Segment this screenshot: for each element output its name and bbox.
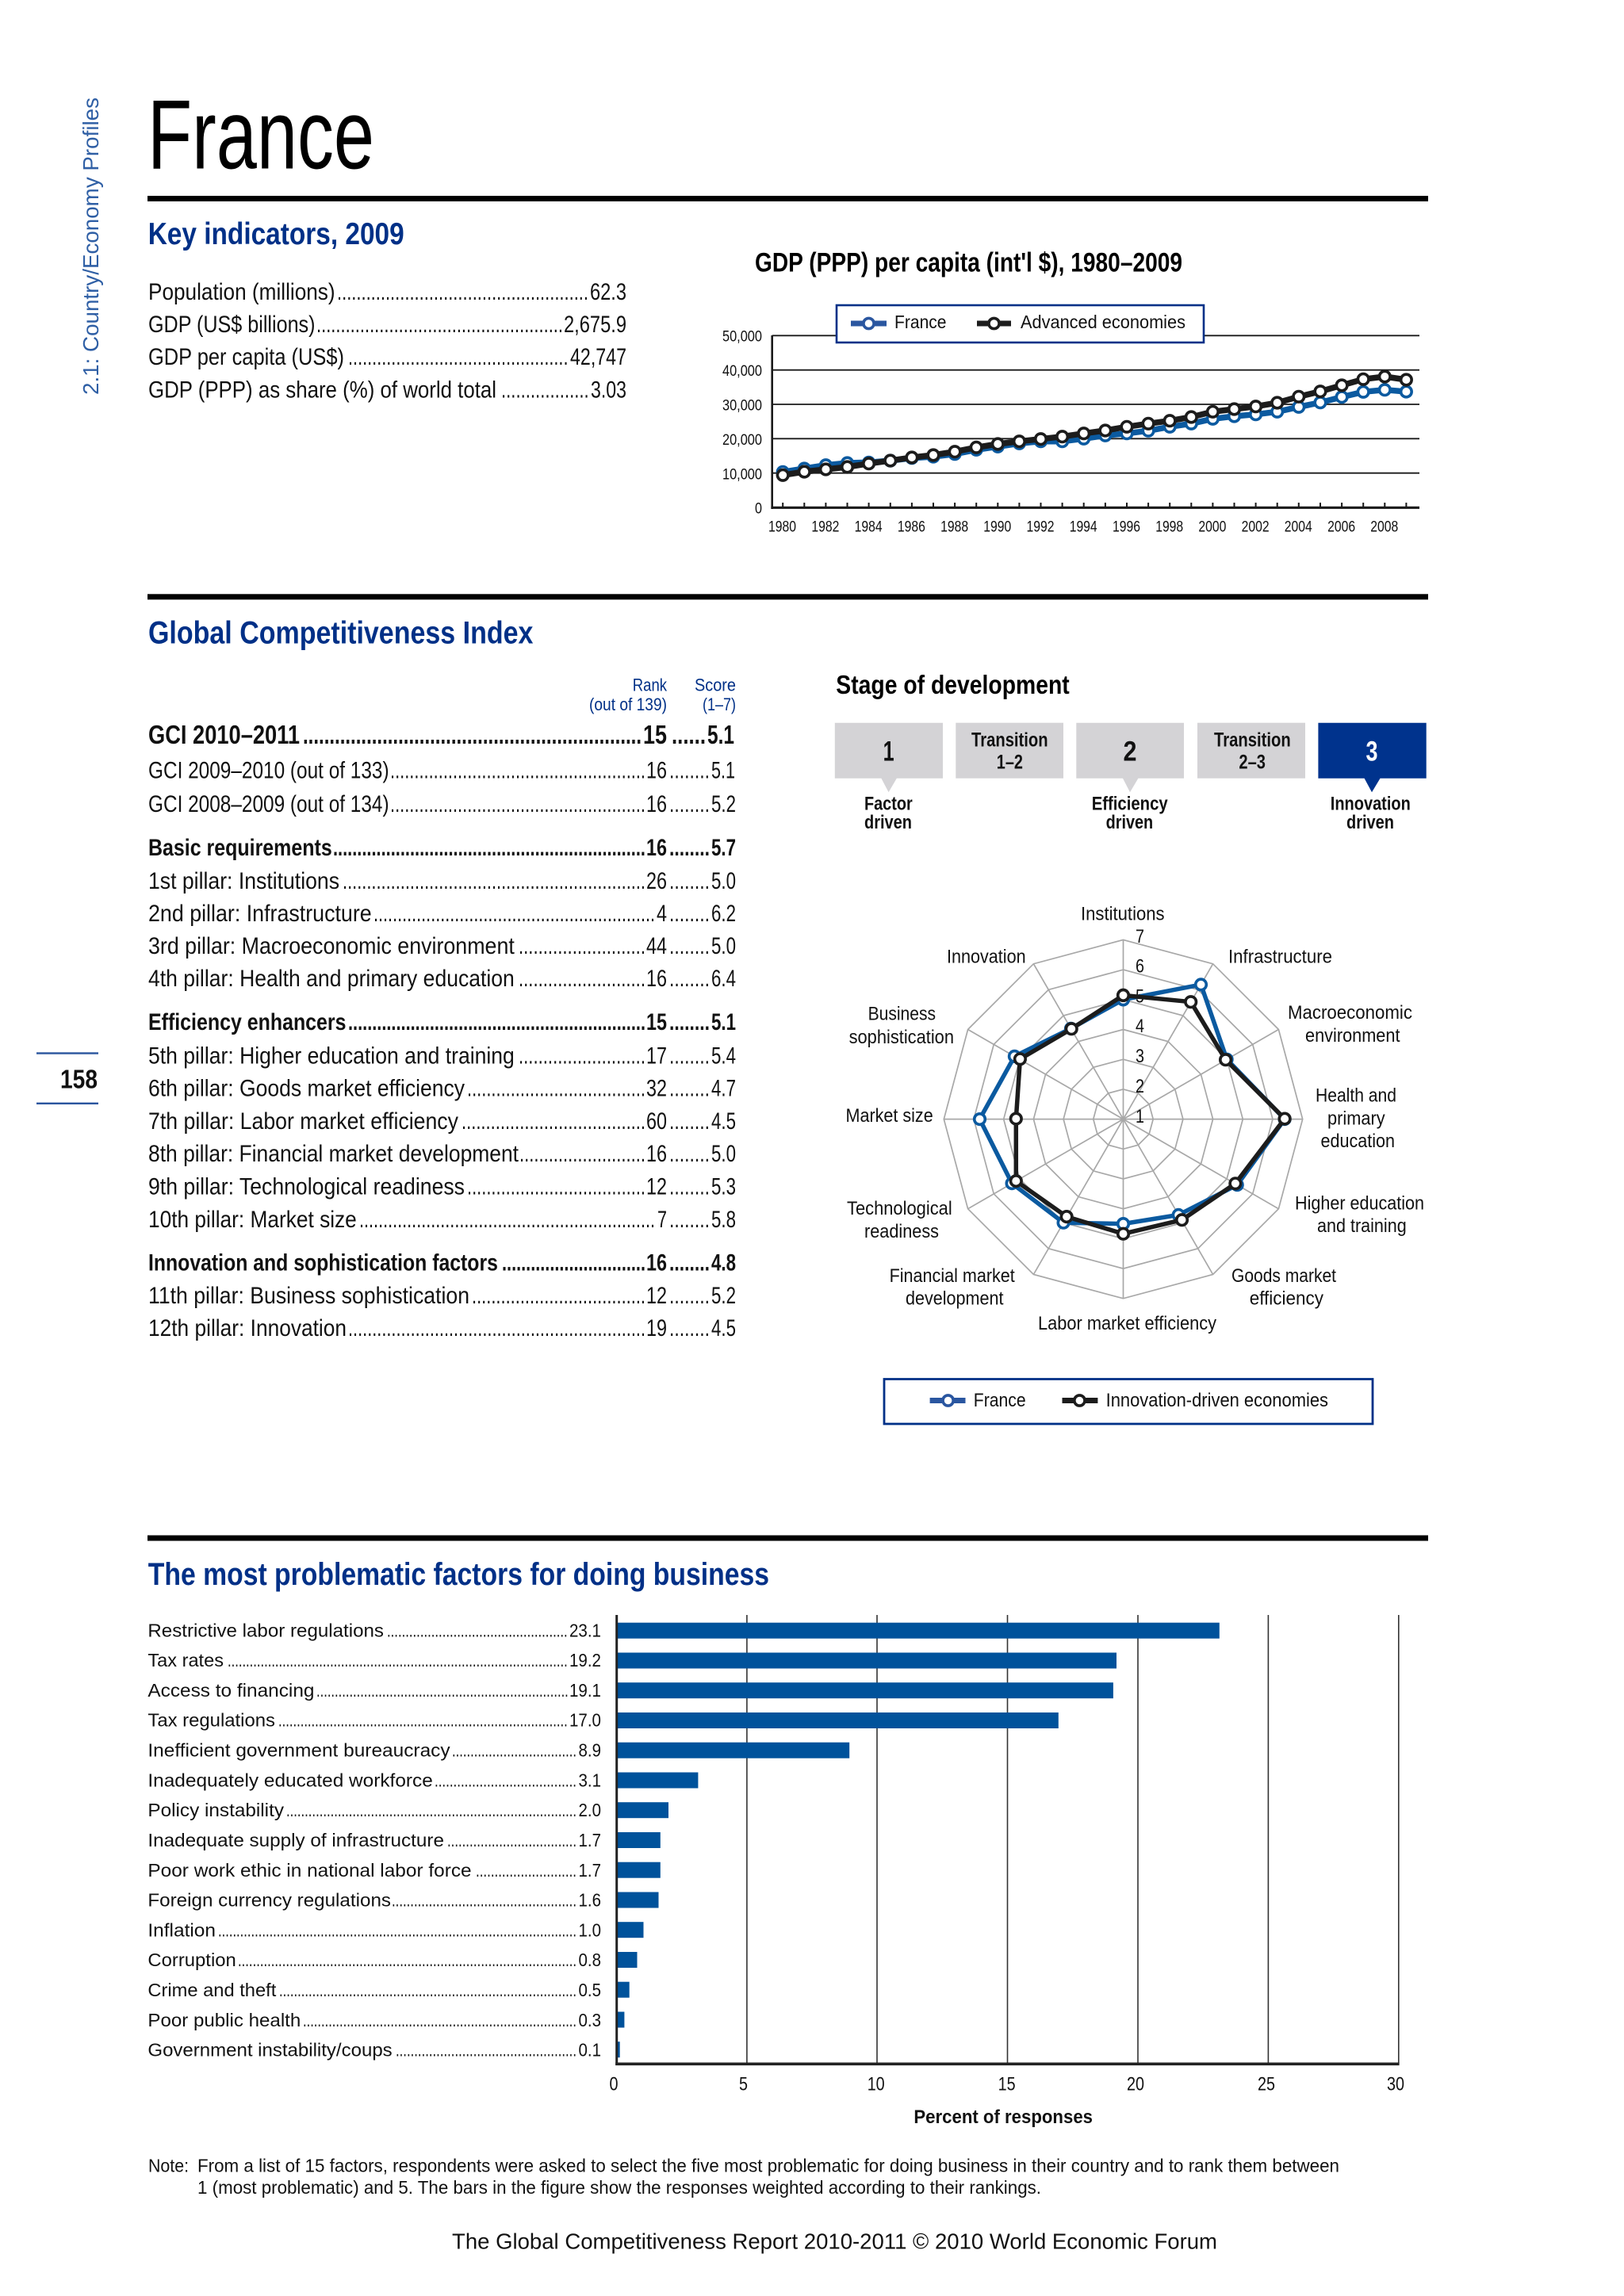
radar axis labels: Goods market: [1231, 1265, 1336, 1287]
radar scale numbers: 6: [1136, 956, 1144, 977]
panel: problematic factors bar chart: [147, 1615, 1404, 2128]
row: 4th pillar: 16: [646, 966, 667, 992]
factor row: tax regulations: Tax regulations: [147, 1709, 275, 1730]
factor row: inadequately educated workforce: 3.1: [579, 1770, 601, 1790]
radar axis labels: primary: [1327, 1108, 1385, 1129]
factor row: tax regulations: [147, 1709, 601, 1730]
factor row: policy instability: ...............................................................................: [286, 1800, 576, 1820]
row: population: Population (millions): [148, 279, 335, 305]
factor row: restrictive labor regulations: .................................................: [387, 1620, 568, 1640]
row: 3rd pillar: [148, 933, 736, 959]
row: 6th pillar: 4.7: [711, 1076, 736, 1102]
row: 9th pillar: 5.3: [711, 1174, 736, 1200]
factor row: policy instability: 2.0: [579, 1800, 601, 1820]
radar axis labels: Health and: [1316, 1085, 1396, 1107]
transition 1-2 box: [956, 723, 1063, 779]
factor row: restrictive labor regulations: 23.1: [569, 1620, 601, 1640]
row: GDP per capita: [148, 344, 626, 370]
x axis labels: 1994: [1070, 519, 1097, 536]
factor row: inadequately educated workforce: Inadequately educated workforce: [147, 1770, 433, 1790]
radar axis labels: Institutions: [1081, 903, 1165, 924]
bars: [617, 1623, 1220, 2057]
column headers: (1–7): [703, 695, 736, 714]
row: 6th pillar: [148, 1076, 736, 1102]
row: innovation and sophistication factors: Innovation and sophistication factors: [148, 1250, 498, 1276]
panel: key indicators: [148, 217, 626, 404]
panel: stage of development: [835, 670, 1427, 833]
row: 9th pillar: 9th pillar: Technological readiness: [148, 1174, 465, 1200]
row: 10th pillar: 7: [657, 1207, 667, 1233]
factor row: tax rates: .............................................................................................: [228, 1650, 568, 1670]
heading: key indicators: Key indicators, 2009: [148, 217, 404, 251]
factor row: access to financing: Access to financing: [147, 1680, 314, 1701]
panel: GCI table: [148, 675, 736, 1341]
row: GCI 2008-2009: ........: [669, 791, 710, 817]
row: GDP share of world: GDP (PPP) as share (%) of world total: [148, 377, 496, 404]
row: innovation and sophistication factors: ..............................: [502, 1250, 645, 1276]
row: 8th pillar: 8th pillar: Financial market development: [148, 1141, 519, 1167]
column headers: Score: [695, 675, 736, 695]
row: 3rd pillar: 3rd pillar: Macroeconomic environment: [148, 933, 515, 959]
row: basic requirements: .................................................................: [333, 835, 645, 861]
x axis labels: 1980: [768, 519, 796, 536]
row: 10th pillar: ........: [669, 1207, 710, 1233]
row: 11th pillar: 12: [646, 1283, 667, 1309]
bar chart x axis labels: 10: [868, 2074, 885, 2095]
chart title: GDP (PPP) per capita (int'l $), 1980–2009: [755, 248, 1182, 278]
radar axis labels: environment: [1305, 1025, 1400, 1047]
row: GCI 2008-2009: 16: [646, 791, 667, 817]
transition 2-3 box: 2–3: [1239, 751, 1266, 773]
x axis labels: 1996: [1113, 519, 1140, 536]
row: GCI 2009-2010: .....................................................: [390, 758, 645, 784]
factor row: tax regulations: ...............................................................................: [278, 1709, 568, 1730]
stage 2 box: 2: [1123, 736, 1137, 767]
factor row: tax rates: 19.2: [569, 1650, 601, 1670]
factor row: foreign currency regulations: [147, 1890, 601, 1911]
row: 8th pillar: ........: [669, 1141, 710, 1167]
y axis labels: 0: [755, 499, 762, 517]
factor row: poor public health: [147, 2010, 601, 2030]
factor row: crime and theft: Crime and theft: [147, 1980, 277, 2000]
radar scale numbers: 5: [1136, 986, 1144, 1008]
row: 7th pillar: [148, 1108, 736, 1135]
factor row: government instability: Government instability/coups: [147, 2040, 393, 2061]
transition 2-3 box: Transition: [1214, 729, 1291, 752]
bar chart axis title: Percent of responses: [914, 2107, 1093, 2128]
row: GDP: [148, 312, 626, 338]
row: 10th pillar: [148, 1207, 736, 1233]
row: 9th pillar: 12: [646, 1174, 667, 1200]
row: population: ....................................................: [337, 279, 588, 305]
row: 11th pillar: [148, 1283, 736, 1309]
row: 2nd pillar: 2nd pillar: Infrastructure: [148, 901, 372, 927]
x axis labels: 1986: [898, 519, 925, 536]
x axis labels: 1990: [983, 519, 1011, 536]
bar chart x axis labels: 20: [1127, 2074, 1144, 2095]
row: 12th pillar: ........: [669, 1315, 710, 1341]
factor row: inefficient government bureaucracy: 8.9: [579, 1739, 601, 1760]
radar scale numbers: 1: [1136, 1106, 1144, 1127]
radar scale numbers: 4: [1136, 1016, 1144, 1037]
row: efficiency enhancers: [148, 1009, 736, 1035]
factor row: poor work ethic: ...........................: [476, 1860, 576, 1881]
row: efficiency enhancers: Efficiency enhancers: [148, 1009, 346, 1035]
radar axis labels: Infrastructure: [1228, 947, 1332, 968]
row: GCI 2009-2010: ........: [669, 758, 710, 784]
heading: stage of development: Stage of development: [836, 670, 1070, 699]
transition 1-2 box: Transition: [971, 729, 1048, 752]
row: 2nd pillar: ...........................................................: [373, 901, 655, 927]
row: GDP per capita: 42,747: [570, 344, 626, 370]
factor row: inadequately educated workforce: [147, 1770, 601, 1790]
row: 7th pillar: 7th pillar: Labor market efficiency: [148, 1108, 458, 1135]
factor row: inadequate supply of infrastructure: Inadequate supply of infrastructure: [147, 1830, 444, 1850]
heading: most problematic factors: The most problematic factors for doing business: [148, 1557, 769, 1592]
radar axis labels: development: [906, 1288, 1004, 1310]
factor row: corruption: Corruption: [147, 1950, 236, 1970]
radar axis labels: efficiency: [1250, 1288, 1323, 1310]
row: GCI 2010-2011: [148, 720, 734, 749]
factor row: inadequate supply of infrastructure: 1.7: [579, 1830, 601, 1850]
stage 3 box (current): [1318, 723, 1427, 833]
transition 1-2 box: 1–2: [997, 751, 1023, 773]
x axis labels: 2006: [1327, 519, 1355, 536]
x axis labels: 1984: [855, 519, 883, 536]
row: GCI 2010-2011: 5.1: [707, 720, 734, 749]
factor row: foreign currency regulations: 1.6: [579, 1890, 601, 1911]
row: 6th pillar: ........: [669, 1076, 710, 1102]
row: 1st pillar: ...............................................................: [343, 868, 645, 894]
y axis labels: 40,000: [722, 362, 762, 380]
stage 3 box (current): Innovation: [1331, 794, 1411, 815]
row: 7th pillar: 60: [646, 1108, 667, 1135]
row: 4th pillar: 6.4: [711, 966, 736, 992]
row: 4th pillar: ........: [669, 966, 710, 992]
factor row: policy instability: Policy instability: [147, 1800, 284, 1820]
factor row: crime and theft: .................................................................................: [279, 1980, 576, 2000]
factor row: poor public health: ...........................................................................: [303, 2010, 576, 2030]
radar legend: France: [974, 1390, 1026, 1411]
factor row: inadequate supply of infrastructure: [147, 1830, 601, 1850]
factor row: access to financing: .....................................................................: [316, 1680, 569, 1701]
radar series: Innovation-driven economies: [1016, 995, 1285, 1234]
row: 3rd pillar: ..........................: [519, 933, 645, 959]
section sidebar label: 2.1: Country/Economy Profiles: [79, 98, 103, 395]
row: 12th pillar: ..............................................................: [348, 1315, 645, 1341]
row: innovation and sophistication factors: ........: [669, 1250, 710, 1276]
row: 5th pillar: 17: [646, 1043, 667, 1070]
y axis labels: 10,000: [722, 465, 762, 483]
row: 1st pillar: 1st pillar: Institutions: [148, 868, 339, 894]
row: 11th pillar: 5.2: [711, 1283, 736, 1309]
factor row: government instability: 0.1: [579, 2040, 601, 2061]
radar axis labels: education: [1321, 1131, 1395, 1152]
transition 2-3 box: [1197, 723, 1305, 779]
row: 5th pillar: 5th pillar: Higher education and training: [148, 1043, 515, 1070]
row: GCI 2008-2009: .....................................................: [390, 791, 645, 817]
row: GDP per capita: GDP per capita (US$): [148, 344, 344, 370]
row: 5th pillar: ..........................: [519, 1043, 645, 1070]
factor row: poor work ethic: [147, 1860, 601, 1881]
radar axis labels: [845, 903, 1424, 1334]
row: basic requirements: ........: [669, 835, 710, 861]
row: basic requirements: Basic requirements: [148, 835, 332, 861]
row: 5th pillar: ........: [669, 1043, 710, 1070]
chart legend: France: [894, 312, 947, 332]
x axis labels: 1992: [1026, 519, 1055, 536]
row: 1st pillar: [148, 868, 736, 894]
radar axis labels: Technological: [847, 1198, 952, 1219]
radar axis labels: sophistication: [849, 1027, 954, 1048]
line: France: [783, 390, 1406, 472]
row: 4th pillar: 4th pillar: Health and primary education: [148, 966, 515, 992]
row: GDP share of world: ..................: [501, 377, 589, 404]
row: 12th pillar: [148, 1315, 736, 1341]
row: 9th pillar: .....................................: [467, 1174, 645, 1200]
radar scale numbers: [1136, 926, 1144, 1127]
row: 12th pillar: 12th pillar: Innovation: [148, 1315, 347, 1341]
row: efficiency enhancers: 15: [646, 1009, 667, 1035]
radar axis labels: Financial market: [890, 1265, 1015, 1287]
x axis labels: 2000: [1198, 519, 1227, 536]
factor row: restrictive labor regulations: Restrictive labor regulations: [147, 1620, 384, 1640]
row: GDP: 2,675.9: [564, 312, 626, 338]
row: population: [148, 279, 626, 305]
factor row: inadequately educated workforce: ......................................: [435, 1770, 576, 1790]
factor row: foreign currency regulations: Foreign currency regulations: [147, 1890, 391, 1911]
row: basic requirements: 5.7: [711, 835, 736, 861]
factor row: inefficient government bureaucracy: ..................................: [452, 1739, 576, 1760]
row: GCI 2009-2010: 5.1: [711, 758, 735, 784]
x axis labels: 2004: [1285, 519, 1312, 536]
factor row: restrictive labor regulations: [147, 1620, 601, 1640]
y axis labels: 20,000: [722, 431, 762, 449]
bar chart x axis labels: 0: [609, 2074, 619, 2095]
x axis labels: 2008: [1370, 519, 1398, 536]
radar legend: [884, 1380, 1373, 1424]
row: GCI 2008-2009: GCI 2008–2009 (out of 134): [148, 791, 389, 817]
x axis labels: 2002: [1242, 519, 1270, 536]
row: 6th pillar: 6th pillar: Goods market efficiency: [148, 1076, 465, 1102]
stage 1 box: [835, 723, 943, 833]
panel: GDP line chart: [722, 248, 1419, 536]
row: 1st pillar: 5.0: [711, 868, 736, 894]
radar axis labels: Market size: [845, 1105, 933, 1127]
page number: [36, 1052, 98, 1104]
bar chart x axis labels: 30: [1387, 2074, 1404, 2095]
panel: radar chart: [845, 903, 1424, 1424]
row: GDP per capita: ..............................................: [348, 344, 568, 370]
factor row: crime and theft: 0.5: [579, 1980, 601, 2000]
row: GCI 2010-2011: ......: [672, 720, 706, 749]
note: From a list of 15 factors, respondents were asked to select the five most problematic for doing business in their country and to rank them between: [197, 2155, 1339, 2175]
row: GDP share of world: 3.03: [591, 377, 626, 404]
row: efficiency enhancers: ..............................................................: [348, 1009, 645, 1035]
column headers: Rank: [633, 675, 668, 695]
row: 2nd pillar: ........: [669, 901, 710, 927]
row: 4th pillar: ..........................: [519, 966, 645, 992]
factor row: inflation: [147, 1919, 601, 1940]
row: 6th pillar: 32: [646, 1076, 667, 1102]
row: GCI 2008-2009: 5.2: [711, 791, 736, 817]
stage 3 box (current): 3: [1365, 736, 1378, 767]
factor row: inflation: ..................................................................................................: [218, 1919, 576, 1940]
stage 2 box: Efficiency: [1092, 794, 1168, 815]
row: 12th pillar: 19: [646, 1315, 667, 1341]
factor row: government instability: [147, 2040, 601, 2061]
factor row: tax regulations: 17.0: [569, 1709, 601, 1730]
row: 8th pillar: 16: [646, 1141, 667, 1167]
radar axis labels: Business: [868, 1004, 936, 1025]
factor row: corruption: ............................................................................................: [238, 1950, 576, 1970]
row: 2nd pillar: 4: [657, 901, 667, 927]
row: GCI 2010-2011: GCI 2010–2011: [148, 720, 300, 749]
factor row: inadequate supply of infrastructure: ...................................: [447, 1830, 576, 1850]
bar chart x axis labels: 5: [739, 2074, 748, 2095]
row: innovation and sophistication factors: 4.8: [711, 1250, 736, 1276]
stage 3 box (current): driven: [1346, 812, 1394, 833]
row: 9th pillar: [148, 1174, 736, 1200]
row: efficiency enhancers: ........: [669, 1009, 710, 1035]
column headers: (out of 139): [589, 695, 667, 714]
radar scale numbers: 2: [1136, 1076, 1144, 1097]
factor row: poor public health: 0.3: [579, 2010, 601, 2030]
factor row: inflation: 1.0: [579, 1919, 601, 1940]
footer: The Global Competitiveness Report 2010-2011 © 2010 World Economic Forum: [452, 2229, 1217, 2254]
y axis labels: 30,000: [722, 396, 762, 414]
chart legend: Advanced economies: [1021, 312, 1185, 332]
row: 3rd pillar: 5.0: [711, 933, 736, 959]
factor row: access to financing: 19.1: [569, 1680, 601, 1701]
column headers: [589, 675, 736, 714]
row: population: 62.3: [590, 279, 626, 305]
x axis labels: [768, 519, 1398, 536]
row: GDP: ...................................................: [316, 312, 563, 338]
factor row: corruption: 0.8: [579, 1950, 601, 1970]
row: 10th pillar: 10th pillar: Market size: [148, 1207, 357, 1233]
row: 8th pillar: 5.0: [711, 1141, 736, 1167]
x axis labels: 1998: [1155, 519, 1183, 536]
radar scale numbers: 7: [1136, 926, 1144, 947]
radar axis labels: Labor market efficiency: [1038, 1313, 1216, 1334]
radar axis labels: readiness: [864, 1221, 939, 1242]
note: Note:: [148, 2155, 189, 2175]
factor row: policy instability: [147, 1800, 601, 1820]
row: GDP: GDP (US$ billions): [148, 312, 316, 338]
row: 11th pillar: ........: [669, 1283, 710, 1309]
row: GCI 2009-2010: 16: [646, 758, 667, 784]
bar chart x axis labels: [609, 2074, 1404, 2095]
row: GCI 2008-2009: [148, 791, 736, 817]
row: 3rd pillar: ........: [669, 933, 710, 959]
row: 10th pillar: ..............................................................: [359, 1207, 655, 1233]
note: 1 (most problematic) and 5. The bars in the figure show the responses weighted according to their rankings.: [197, 2177, 1041, 2198]
row: 2nd pillar: 6.2: [711, 901, 736, 927]
row: 12th pillar: 4.5: [711, 1315, 736, 1341]
row: 3rd pillar: 44: [646, 933, 667, 959]
row: GCI 2010-2011: ................................................................: [303, 720, 642, 749]
row: 7th pillar: 4.5: [711, 1108, 736, 1135]
radar axis labels: Higher education: [1295, 1192, 1424, 1214]
row: 9th pillar: ........: [669, 1174, 710, 1200]
stage 1 box: 1: [883, 736, 894, 767]
factor row: inefficient government bureaucracy: Inefficient government bureaucracy: [147, 1739, 450, 1760]
row: 7th pillar: ........: [669, 1108, 710, 1135]
factor row: corruption: [147, 1950, 601, 1970]
bar chart x axis labels: 15: [998, 2074, 1016, 2095]
factor row: inflation: Inflation: [147, 1919, 216, 1940]
stage 2 box: driven: [1106, 812, 1153, 833]
row: 7th pillar: ......................................: [462, 1108, 645, 1135]
y axis labels: 50,000: [722, 328, 762, 346]
row: innovation and sophistication factors: 16: [646, 1250, 667, 1276]
radar axis labels: and training: [1317, 1215, 1407, 1237]
row: 11th pillar: 11th pillar: Business sophistication: [148, 1283, 469, 1309]
row: basic requirements: [148, 835, 736, 861]
x axis labels: 1982: [811, 519, 839, 536]
factor row: access to financing: [147, 1680, 601, 1701]
note: [148, 2155, 1339, 2198]
factor row: crime and theft: [147, 1980, 601, 2000]
row: 6th pillar: .....................................: [467, 1076, 645, 1102]
line: Advanced economies: [783, 377, 1406, 475]
row: basic requirements: 16: [646, 835, 667, 861]
chart legend: [837, 305, 1204, 342]
row: 8th pillar: ..........................: [519, 1141, 645, 1167]
row: 2nd pillar: [148, 901, 736, 927]
heading: Global Competitiveness Index: Global Competitiveness Index: [148, 616, 533, 651]
row: GCI 2009-2010: GCI 2009–2010 (out of 133): [148, 758, 389, 784]
page number: 158: [60, 1065, 98, 1094]
radar scale numbers: 3: [1136, 1046, 1144, 1067]
row: 5th pillar: 5.4: [711, 1043, 736, 1070]
row: efficiency enhancers: 5.1: [711, 1009, 736, 1035]
stage 2 box: [1076, 723, 1184, 833]
stage 1 box: driven: [864, 812, 912, 833]
row: GCI 2010-2011: 15: [643, 720, 667, 749]
radar legend: Innovation-driven economies: [1106, 1390, 1328, 1411]
factor row: tax rates: [147, 1650, 601, 1670]
factor row: tax rates: Tax rates: [147, 1650, 224, 1670]
row: 11th pillar: ....................................: [472, 1283, 645, 1309]
row: 1st pillar: 26: [646, 868, 667, 894]
radar axis labels: Macroeconomic: [1288, 1002, 1412, 1024]
y axis labels: [722, 328, 762, 517]
radar series: France: [980, 985, 1285, 1224]
factor row: poor public health: Poor public health: [147, 2010, 301, 2030]
row: 10th pillar: 5.8: [711, 1207, 736, 1233]
factor row: government instability: .................................................: [396, 2040, 576, 2061]
radar axis labels: Innovation: [947, 947, 1026, 968]
stage 1 box: Factor: [864, 794, 913, 815]
factor row: poor work ethic: 1.7: [579, 1860, 601, 1881]
factor row: inefficient government bureaucracy: [147, 1739, 601, 1760]
x axis labels: 1988: [940, 519, 968, 536]
bar chart x axis labels: 25: [1258, 2074, 1275, 2095]
factor row: poor work ethic: Poor work ethic in national labor force: [147, 1860, 472, 1881]
row: 1st pillar: ........: [669, 868, 710, 894]
factor row: foreign currency regulations: ..................................................: [392, 1890, 576, 1911]
title: France: [147, 81, 374, 190]
row: GCI 2009-2010: [148, 758, 735, 784]
